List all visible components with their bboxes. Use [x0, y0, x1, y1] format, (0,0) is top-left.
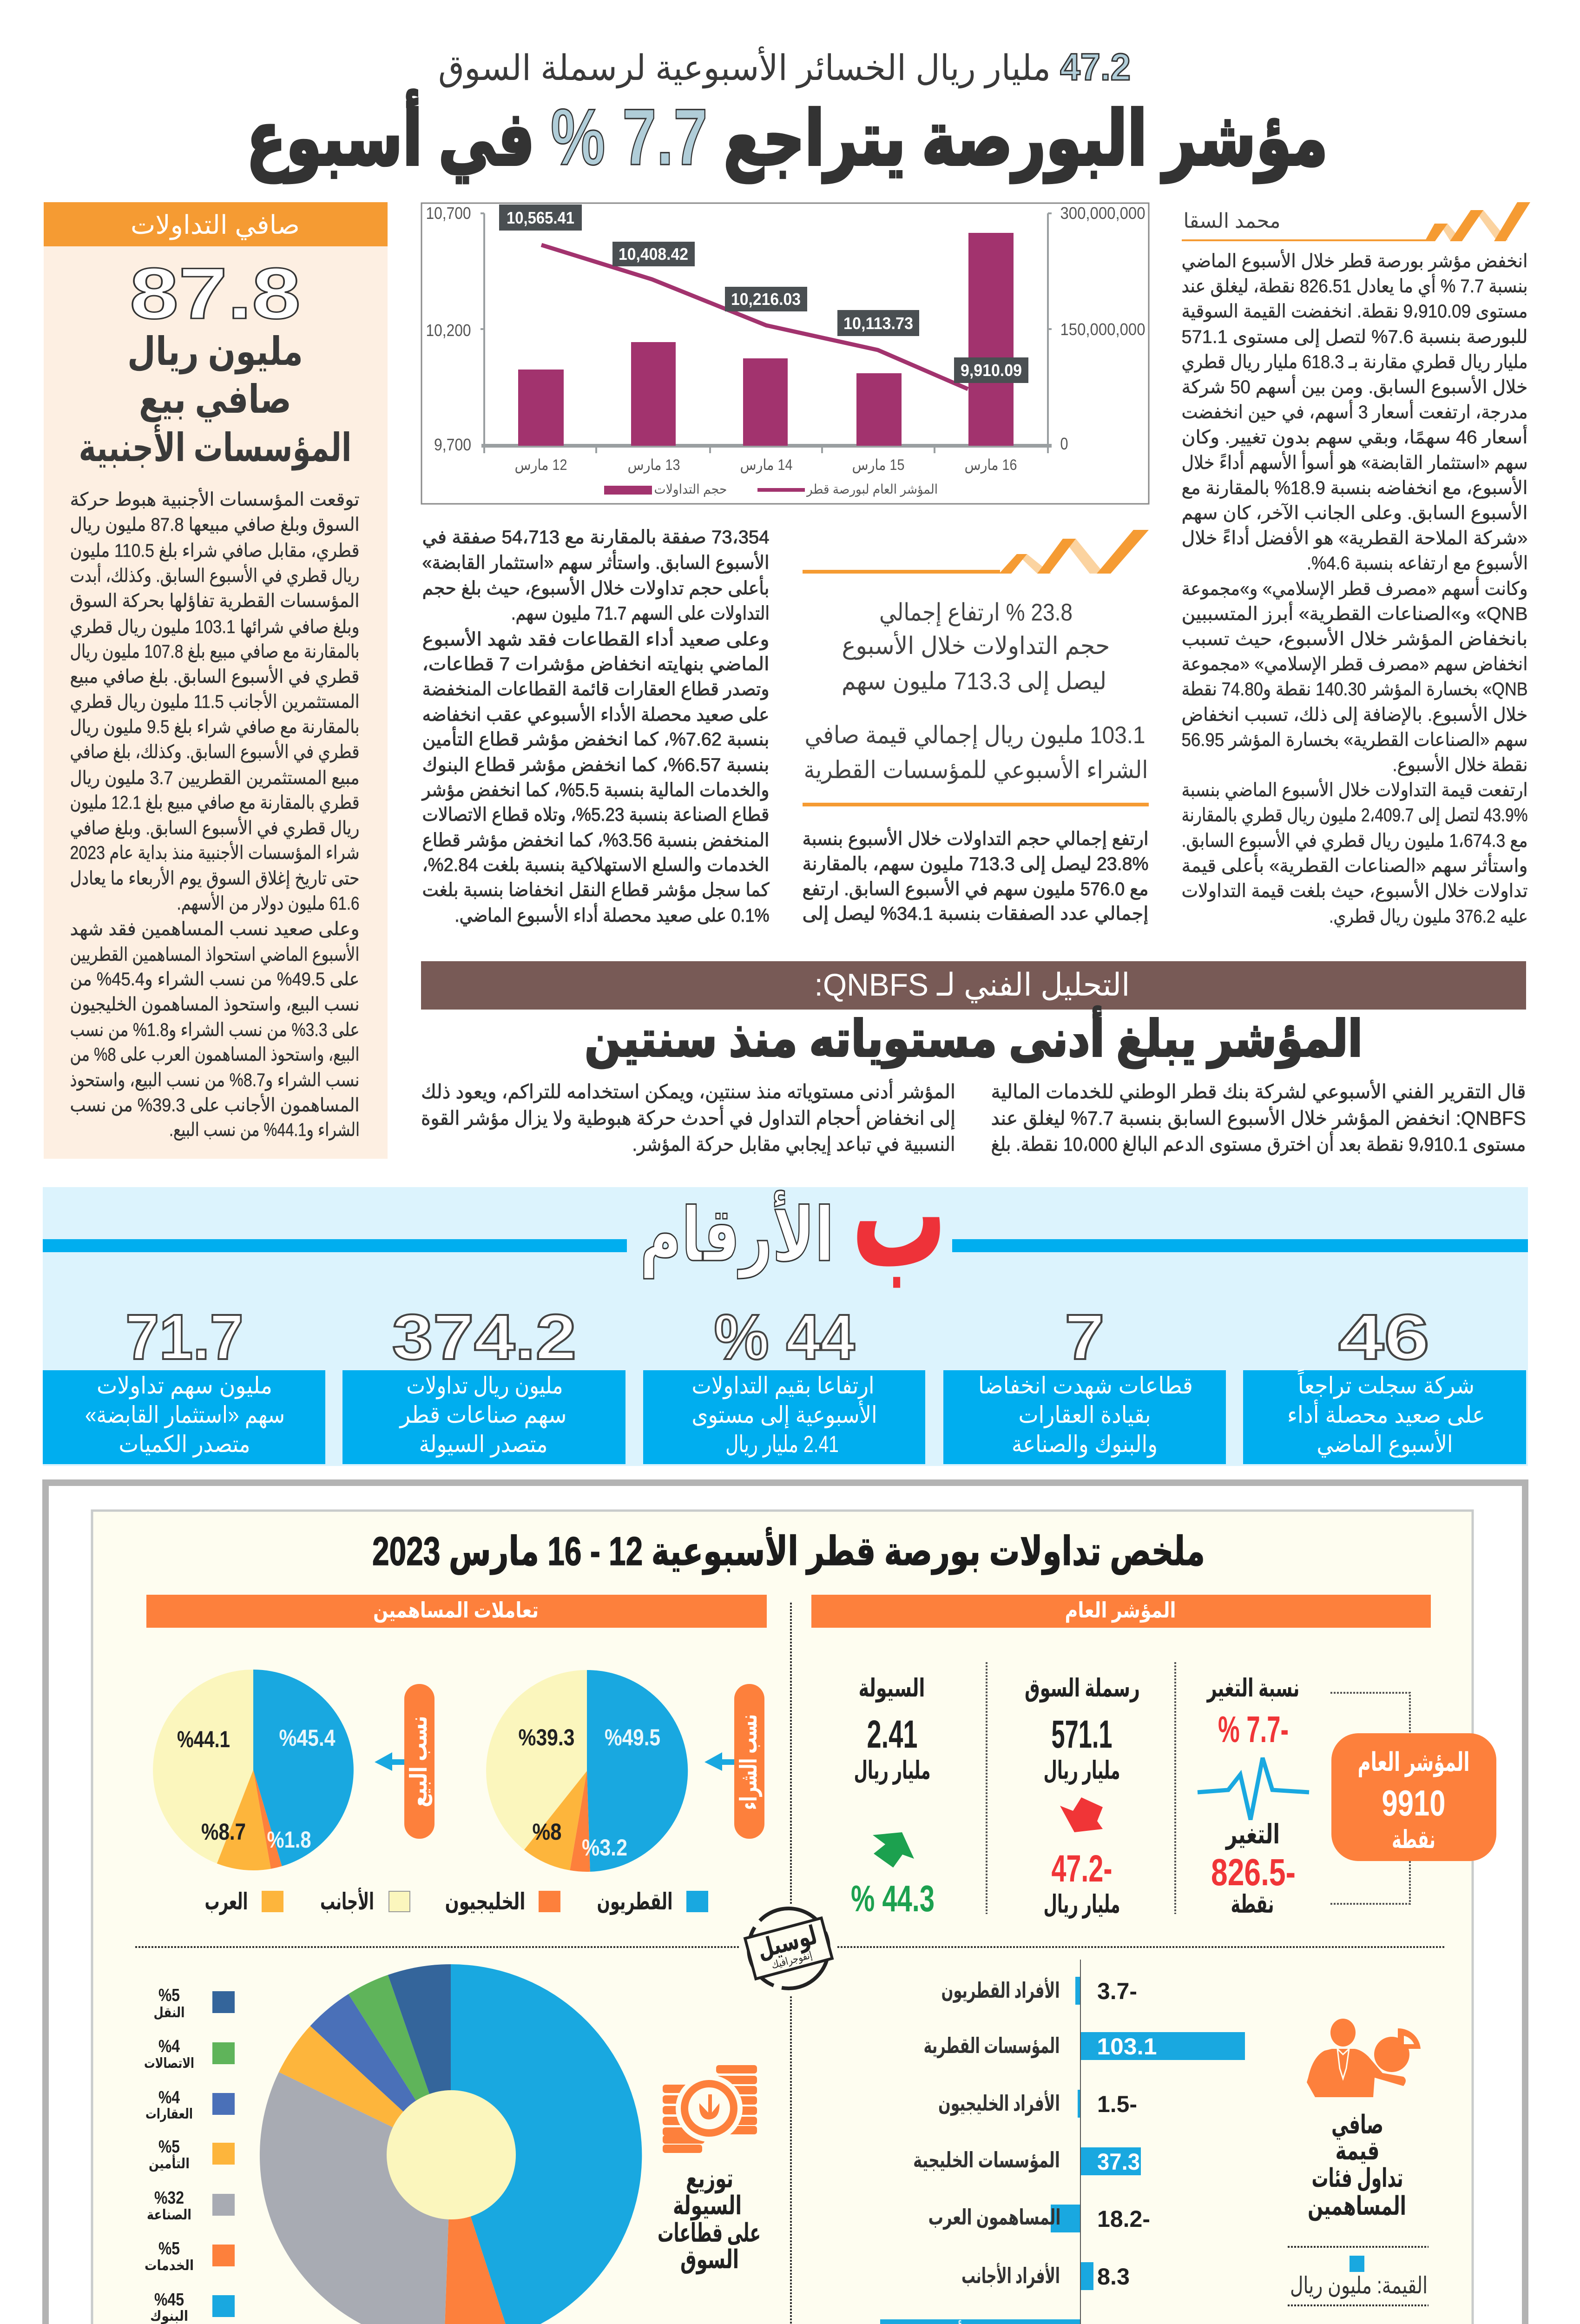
author byline with zigzag	[1182, 202, 1530, 241]
stat card: 71.7: مليون سهم تداولات	[97, 1373, 272, 1400]
date labels	[515, 456, 1017, 474]
article column middle	[421, 527, 770, 926]
stat numbers: 374.2	[392, 1301, 576, 1373]
donut title: على قطاعات	[658, 2218, 761, 2247]
value labels: 10,565.41	[507, 208, 574, 227]
value key	[1288, 2247, 1429, 2305]
donut legend: الخدمات	[145, 2258, 194, 2273]
axis labels: 10,200	[426, 321, 471, 340]
donut legend: %5	[158, 1986, 180, 2005]
panel background	[92, 1511, 1473, 2324]
panel headline	[79, 330, 351, 471]
technical analysis text right: QNBFS: انخفض المؤشر خلال الأسبوع السابق بنسبة 7.7% ليغلق عند	[991, 1106, 1526, 1129]
callout: highlights: 23.8 % ارتفاع إجمالي	[879, 599, 1073, 627]
article column middle: كما سجل مؤشر قطاع النقل انخفاضا بنسبة بلغت	[422, 880, 770, 901]
bars	[880, 1977, 1245, 2324]
big number: 87.8	[130, 253, 301, 334]
axis labels: 0	[1060, 434, 1068, 453]
pie legend: الأجانب	[320, 1887, 374, 1915]
donut legend: %4	[158, 2037, 180, 2056]
panel headline: مليون ريال	[127, 330, 303, 375]
article column middle: وعلى صعيد أداء القطاعات فقد شهد الأسبوع	[422, 627, 770, 650]
stamp	[745, 1908, 832, 1988]
panel body text	[70, 488, 360, 1141]
technical analysis text right: قال التقرير الفني الأسبوعي لشركة بنك قطر الوطني للخدمات المالية	[991, 1079, 1526, 1103]
value key: القيمة: مليون ريال	[1290, 2272, 1428, 2299]
stat: liquidity: % 44.3	[851, 1878, 935, 1919]
stat numbers: 46	[1338, 1301, 1429, 1373]
panel body text: على 3.3% من نسب الشراء و1.8% من نسب	[70, 1020, 360, 1041]
net value title: تداول فئات	[1311, 2163, 1403, 2193]
donut legend: الصناعة	[147, 2207, 191, 2223]
article column right: خلال الأسبوع السابق. ومن بين أسهم 50 شركة	[1181, 375, 1528, 398]
technical analysis text right	[991, 1079, 1526, 1156]
technical analysis text right: مستوى 9،910.1 نقطة بعد أن اخترق مستوى الدعم البالغ 10،000 نقطة. بلغ	[991, 1131, 1526, 1156]
sell pie chart: %8.7	[201, 1819, 246, 1845]
article column right: نقطة خلال الأسبوع.	[1392, 753, 1528, 776]
article column middle: التداولات على السهم 71.7 مليون سهم.	[511, 603, 770, 624]
stat: liquidity: 2.41	[867, 1712, 917, 1756]
arrow: sell pill to pie	[375, 1752, 404, 1771]
article column middle: قطاع الصناعة بنسبة 5.23%، وتلاه قطاع الاتصالات	[422, 805, 770, 825]
sell pie chart: %45.4	[279, 1725, 336, 1751]
article column right: بانخفاض المؤشر خلال الأسبوع، حيث تسبب	[1181, 627, 1528, 650]
chart: index and trading volume	[421, 203, 1149, 504]
article column right: أسعار 46 سهمًا، وبقي سهم بدون تغيير. وكان	[1181, 425, 1528, 448]
buy pie chart: %49.5	[605, 1724, 660, 1750]
axes	[481, 213, 1052, 453]
donut title	[658, 2164, 761, 2275]
pie legend: العرب	[204, 1888, 248, 1915]
header: shareholder transactions: تعاملات المساهمين	[373, 1598, 539, 1623]
panel background	[44, 202, 388, 1159]
sell pie chart: %44.1	[177, 1726, 230, 1752]
panel body text: وعلى صعيد نسب المساهمين فقد شهد	[70, 919, 360, 940]
stat: change: % 7.7-	[1218, 1709, 1289, 1750]
panel body text: قطري في الأسبوع السابق. بلغ صافي مبيع	[70, 665, 360, 687]
infographic title: ملخص تداولات بورصة قطر الأسبوعية 12 - 16 مارس 2023	[372, 1527, 1205, 1575]
date labels: 14 مارس	[740, 456, 793, 474]
stat: market cap: مليار ريال	[1044, 1890, 1120, 1919]
article column middle: الأسبوع السابق. واستأثر سهم «استثمار القابضة»	[422, 550, 770, 574]
stat card: 44 percent: الأسبوعية إلى مستوى	[691, 1400, 877, 1429]
sell pie chart: %1.8	[267, 1827, 311, 1853]
article column middle: الماضي بنهايته انخفاض مؤشرات 7 قطاعات،	[422, 654, 770, 675]
article column right: الأسبوع السابق. وعلى الجانب الآخر، كان سهم	[1181, 501, 1528, 524]
row labels: المؤسسات الخليجية	[913, 2148, 1060, 2172]
stat: market cap: 47.2-	[1051, 1848, 1113, 1890]
stat: liquidity: مليار ريال	[854, 1756, 930, 1785]
article column middle: بنسبة 6.57%، كما انخفض مؤشر قطاع البنوك	[422, 755, 770, 776]
panel body text: الأسبوع الماضي استحواذ المساهمين القطريين	[70, 943, 360, 965]
infographic outer frame	[46, 1483, 1525, 2324]
panel body text: السوق وبلغ صافي مبيعها 87.8 مليون ريال	[70, 515, 360, 535]
article column middle: المنخفض بنسبة 3.56%، كما انخفض مؤشر قطاع	[422, 830, 770, 851]
icon: coin stacks	[663, 2065, 757, 2153]
row labels	[913, 1977, 1060, 2324]
panel body text: بالمقارنة مع صافي شراء بلغ 9.5 مليون ريال	[70, 717, 360, 738]
row values: 103.1	[1097, 2034, 1157, 2060]
donut chart	[260, 1964, 642, 2324]
axis labels	[426, 204, 1145, 454]
net value bar chart	[880, 1960, 1245, 2324]
pill: buy ratios	[734, 1684, 764, 1839]
net value title: المساهمين	[1308, 2191, 1406, 2221]
article column middle: على صعيد محصلة الأداء الأسبوعي عقب انخفاضه	[422, 703, 770, 726]
author byline with zigzag: محمد السقا	[1183, 210, 1281, 232]
stat card: 46: شركة سجلت تراجعاً	[1298, 1369, 1475, 1399]
stat: market cap: رسملة السوق	[1025, 1674, 1140, 1703]
panel body text: ريال قطري في الأسبوع السابق. وكذلك، أبدت	[70, 563, 360, 587]
panel body text: قطري في الأسبوع السابق. وكذلك، بلغ صافي	[70, 740, 360, 763]
stat: change: التغير	[1225, 1819, 1280, 1850]
stat card: 374.2: سهم صناعات قطر	[399, 1402, 567, 1429]
article column right: واستأثر سهم «الصناعات القطرية» بأعلى قيمة	[1181, 853, 1528, 877]
stamp: لوسيل	[754, 1920, 820, 1965]
article column right: وكانت أسهم «مصرف قطر الإسلامي» و»مجموعة	[1181, 576, 1528, 600]
date labels: 13 مارس	[627, 456, 680, 474]
donut title: السوق	[680, 2245, 739, 2275]
icon: rising zigzag	[803, 530, 1149, 574]
pie legend: القطريون	[597, 1888, 673, 1915]
pie legend	[204, 1887, 708, 1915]
section heading: ب	[851, 1131, 947, 1297]
donut legend	[144, 1986, 235, 2324]
row values: 1.5-	[1097, 2091, 1137, 2117]
row labels: الأفراد القطريون	[941, 1977, 1060, 2003]
stat card: 374.2: متصدر السيولة	[419, 1431, 547, 1458]
net value title: قيمة	[1336, 2136, 1379, 2165]
article column right: مدرجة، ارتفعت أسعار 3 أسهم، في حين انخفضت	[1181, 400, 1528, 423]
article column middle continuation: 23.8% ليصل إلى 713.3 مليون سهم، بالمقارنة	[802, 854, 1149, 875]
panel: net trading	[44, 202, 388, 1159]
donut legend: %4	[158, 2088, 180, 2107]
stat card: 46: على صعيد محصلة أداء	[1287, 1400, 1485, 1428]
stat: change: 826.5-	[1211, 1851, 1296, 1894]
stat: change	[1198, 1674, 1309, 1918]
article column right: عليه 376.2 مليون ريال قطري.	[1329, 906, 1528, 927]
article column right: انخفاض سهم «مصرف قطر الإسلامي» «مجموعة	[1181, 654, 1528, 675]
article column middle: 0.1% على صعيد محصلة أداء الأسبوع الماضي.	[454, 903, 770, 926]
stat: liquidity	[851, 1674, 935, 1919]
row labels: المساهمون العرب	[928, 2205, 1060, 2230]
axis labels: 10,700	[426, 204, 471, 223]
stat: market cap: 571.1	[1051, 1712, 1113, 1756]
chart legend: المؤشر العام لبورصة قطر	[806, 482, 938, 497]
stat card: 7: والبنوك والصناعة	[1012, 1431, 1158, 1458]
arrow: buy pill to pie	[704, 1752, 734, 1771]
value labels	[499, 205, 1028, 383]
donut legend: النقل	[153, 2005, 185, 2020]
axis labels: 300,000,000	[1060, 204, 1145, 223]
section heading: الأرقام	[640, 1190, 834, 1279]
donut legend: %32	[154, 2188, 184, 2208]
technical analysis banner: التحليل الفني لـ QNBFS:	[814, 967, 1130, 1004]
article column right: تداولات خلال الأسبوع، حيث بلغت قيمة التداولات	[1181, 879, 1528, 902]
stat card: 7: قطاعات شهدت انخفاضا	[978, 1373, 1193, 1400]
stamp: إنفوجرافيك	[770, 1949, 814, 1971]
donut title: توزيع	[686, 2164, 733, 2194]
row values: 3.7-	[1097, 1978, 1137, 2004]
stat card: 44 percent: ارتفاعا بقيم التداولات	[691, 1373, 875, 1400]
axis labels: 9,700	[434, 435, 471, 454]
article column right: للبورصة بنسبة 7.6% لتصل إلى مستوى 571.1	[1181, 327, 1528, 348]
bars	[518, 233, 1014, 446]
article column right: 43.9% لتصل إلى 2،409.7 مليون ريال قطري بالمقارنة	[1181, 805, 1528, 826]
article column middle: وتصدر قطاع العقارات قائمة القطاعات المنخفضة	[422, 679, 770, 700]
orange rule	[803, 803, 1149, 806]
header: shareholder transactions	[146, 1595, 767, 1628]
donut legend: الاتصالات	[144, 2056, 194, 2071]
article column middle continuation: ارتفع إجمالي حجم التداولات خلال الأسبوع بنسبة	[802, 827, 1149, 850]
panel headline: صافي بيع	[139, 377, 291, 423]
buy pie chart	[486, 1670, 688, 1872]
chart legend: حجم التداولات	[654, 482, 727, 497]
callout: highlights: ليصل إلى 713.3 مليون سهم	[842, 668, 1106, 695]
subtitle: 47.2 مليار ريال الخسائر الأسبوعية لرسملة السوق	[438, 46, 1131, 89]
article column right: «شركة الملاحة القطرية» هو الأفضل أداءً خلال	[1181, 526, 1528, 549]
stat card: 374.2	[342, 1370, 625, 1464]
axis	[1080, 1960, 1081, 2324]
article column right: سهم «الصناعات القطرية» بخسارة المؤشر 56.95	[1181, 730, 1528, 751]
article column right: انخفض مؤشر بورصة قطر خلال الأسبوع الماضي	[1181, 249, 1528, 272]
section background	[43, 1187, 1528, 1466]
stat numbers	[125, 1301, 1429, 1373]
net value title: صافي	[1331, 2110, 1383, 2140]
donut legend: العقارات	[145, 2106, 193, 2122]
pie legend: الخليجيون	[445, 1888, 525, 1915]
stat card: 71.7	[43, 1370, 325, 1464]
general index badge	[1331, 1733, 1496, 1861]
row labels: الأفراد الخليجيون	[938, 2090, 1060, 2116]
stat card: 71.7: سهم «استثمار القابضة»	[85, 1402, 285, 1429]
technical analysis text left: النسبية في تباعد إيجابي مقابل حركة المؤشر.	[632, 1133, 955, 1156]
donut legend: البنوك	[150, 2309, 188, 2324]
panel body text: شراء المؤسسات الأجنبية منذ بداية عام 2023	[70, 841, 360, 864]
article column middle continuation	[802, 827, 1149, 924]
stat: change: نسبة التغير	[1206, 1674, 1299, 1703]
stat: change: نقطة	[1231, 1890, 1274, 1918]
general index badge: نقطة	[1392, 1826, 1435, 1854]
stat card: 374.2: مليون ريال تداولات	[406, 1373, 563, 1400]
panel: by the numbers	[43, 1131, 1528, 1466]
panel body text: نسب الشراء و8.7% من نسب البيع، واستحوذ	[70, 1070, 360, 1091]
buy pie chart: %3.2	[582, 1835, 627, 1861]
header: general index: المؤشر العام	[1065, 1598, 1176, 1623]
general index badge: 9910	[1382, 1783, 1445, 1823]
icon: presenter with pie chart	[1307, 2019, 1421, 2097]
technical analysis text left: إلى انخفاض أحجام التداول في أحدث حركة هبوطية ولا يزال مؤشر القوة	[421, 1105, 955, 1130]
header: general index	[811, 1595, 1431, 1628]
article column middle: بأعلى حجم تداولات خلال الأسبوع، حيث بلغ حجم	[422, 575, 770, 599]
panel body text: قطري، مقابل صافي شراء بلغ 110.5 مليون	[70, 541, 360, 561]
panel body text: حتى تاريخ إغلاق السوق يوم الأربعاء ما يعادل	[70, 866, 360, 889]
icon: red down arrow	[1060, 1797, 1103, 1832]
article column right: مليار ريال قطري مقارنة بـ 618.3 مليار ريال قطري	[1181, 352, 1528, 373]
panel body text: المساهمون الأجانب على 39.3% من نسب	[70, 1093, 360, 1116]
callout: highlights: حجم التداولات خلال الأسبوع	[842, 631, 1110, 660]
main title: مؤشر البورصة يتراجع 7.7 % في أسبوع	[246, 90, 1328, 183]
stat: market cap: مليار ريال	[1044, 1756, 1120, 1785]
article column middle: 73،354 صفقة بالمقارنة مع 54،713 صفقة في	[422, 527, 770, 548]
buy pie chart: %8	[533, 1819, 561, 1845]
stat card: 44 percent	[643, 1370, 925, 1464]
article column right: سهم «استثمار القابضة» هو أسوأ الأسهم أداءً خلال	[1181, 450, 1528, 474]
panel body text: المؤسسات القطرية تفاؤلها بحركة السوق	[70, 591, 360, 612]
technical analysis heading: المؤشر يبلغ أدنى مستوياته منذ سنتين	[585, 1006, 1363, 1069]
panel body text: بالمقارنة مع صافي مبيع بلغ 107.8 مليون ريال	[70, 641, 359, 662]
article column right	[1181, 249, 1528, 927]
chart frame	[421, 203, 1149, 504]
panel body text: مبيع المستثمرين القطريين 3.7 مليون ريال	[70, 768, 360, 789]
donut legend: %5	[158, 2137, 180, 2157]
panel headline: المؤسسات الأجنبية	[79, 424, 351, 471]
stat card: 44 percent: 2.41 مليار ريال	[725, 1431, 839, 1458]
section heading	[640, 1131, 947, 1297]
axis labels: 150,000,000	[1060, 320, 1145, 339]
panel header: صافي التداولات	[131, 210, 300, 240]
panel body text: توقعت المؤسسات الأجنبية هبوط حركة	[70, 488, 360, 510]
icon: green up arrow	[873, 1832, 914, 1868]
index line	[541, 245, 968, 389]
callout: highlights: 103.1 مليون ريال إجمالي قيمة صافي	[805, 722, 1145, 749]
donut legend: %5	[158, 2239, 180, 2258]
article column middle continuation: إجمالي عدد الصفقات بنسبة 34.1% ليصل إلى	[802, 904, 1149, 924]
stat: liquidity: السيولة	[859, 1674, 925, 1703]
article column right: مستوى 9،910.09 نقطة. انخفضت القيمة السوقية	[1181, 301, 1528, 322]
panel body text: نسب البيع، واستحوذ المساهمون الخليجيون	[70, 994, 360, 1015]
panel body text: قطري بالمقارنة مع صافي مبيع بلغ 12.1 مليون	[70, 792, 360, 813]
pill: buy ratios: نسب الشراء	[736, 1714, 763, 1810]
donut legend: التأمين	[149, 2154, 190, 2172]
row labels: المؤسسات القطرية	[924, 2034, 1060, 2058]
dotted dividers	[135, 1603, 1444, 2324]
stat card: 46: الأسبوع الماضي	[1317, 1430, 1453, 1458]
stat card: 7: بقيادة العقارات	[1019, 1402, 1151, 1428]
pill: sell ratios	[404, 1684, 434, 1839]
value labels: 9,910.09	[961, 361, 1022, 380]
technical analysis text left	[421, 1079, 955, 1156]
net value title	[1308, 2110, 1406, 2221]
callout: highlights: الشراء الأسبوعي للمؤسسات القطرية	[804, 755, 1148, 784]
pill: sell ratios: نسب البيع	[406, 1716, 433, 1807]
article column middle: الخدمات والسلع الاستهلاكية بنسبة بلغت 2.84%،	[422, 855, 770, 876]
technical analysis banner	[421, 961, 1526, 1010]
sell pie chart	[153, 1670, 354, 1870]
article column middle continuation: مع 576.0 مليون سهم في الأسبوع السابق. ارتفع	[802, 877, 1149, 900]
article column right: خلال الأسبوع. بالإضافة إلى ذلك، تسبب انخفاض	[1181, 703, 1528, 726]
value labels: 10,113.73	[843, 314, 913, 333]
row values: 8.3	[1097, 2264, 1130, 2290]
chart legend	[604, 482, 938, 497]
date labels: 12 مارس	[515, 456, 567, 474]
panel body text: على 49.5% من نسب الشراء و45.4% من	[70, 969, 360, 990]
section rails	[43, 1239, 1528, 1252]
stat numbers: 71.7	[125, 1301, 244, 1373]
article column middle: والخدمات المالية بنسبة 5.5%، كما انخفض مؤشر	[421, 780, 770, 801]
panel header	[44, 202, 388, 246]
panel body text: المستثمرين الأجانب 11.5 مليون ريال قطري	[70, 690, 360, 713]
article column right: QNB» بخسارة المؤشر 140.30 نقطة و74.80 نقطة	[1181, 679, 1528, 700]
row labels: الأفراد الأجانب	[961, 2263, 1060, 2288]
article column right: بنسبة 7.7 % أي ما يعادل 826.51 نقطة، ليغلق عند	[1181, 274, 1528, 297]
article column right: الأسبوع مع ارتفاعه بنسبة 4.6%.	[1307, 551, 1528, 574]
article column right: ارتفعت قيمة التداولات خلال الأسبوع الماضي بنسبة	[1181, 778, 1528, 801]
date labels: 15 مارس	[852, 456, 904, 474]
donut legend: %45	[154, 2290, 184, 2310]
value labels: 10,408.42	[619, 244, 688, 264]
date labels: 16 مارس	[965, 456, 1017, 474]
stat card: 71.7: متصدر الكميات	[119, 1431, 250, 1458]
article column middle: بنسبة 7.62%، كما انخفض مؤشر قطاع التأمين	[422, 726, 770, 750]
stat numbers: 7	[1065, 1301, 1105, 1373]
panel body text: الشراء و44.1% من نسب البيع.	[169, 1120, 360, 1141]
article column right: QNB» و»الصناعات القطرية» أبرز المتسببين	[1181, 601, 1528, 625]
stat numbers: % 44	[714, 1301, 855, 1373]
general index badge: المؤشر العام	[1358, 1747, 1469, 1777]
buy pie chart: %39.3	[519, 1724, 574, 1750]
infographic panel	[92, 1511, 1496, 2324]
stat card: 46	[1243, 1369, 1526, 1464]
row values: 18.2-	[1097, 2206, 1150, 2232]
article column right: مع 1،674.3 مليون ريال قطري في الأسبوع السابق.	[1181, 829, 1528, 852]
panel body text: ريال قطري في الأسبوع السابق. وبلغ صافي	[70, 816, 360, 839]
stat: market cap	[1025, 1674, 1140, 1919]
panel body text: البيع، واستحوذ المساهمون العرب على 8% من	[70, 1044, 360, 1065]
row values: 37.3	[1097, 2149, 1140, 2175]
value labels: 10,216.03	[731, 290, 801, 309]
panel body text: 61.6 مليون دولار من الأسهم.	[177, 891, 360, 914]
row values	[1097, 1978, 1165, 2324]
article column right: الأسبوع، مع انخفاضه بنسبة 18.9% بالمقارنة مع	[1181, 476, 1528, 499]
panel body text: وبلغ صافي شرائها 103.1 مليون ريال قطري	[70, 617, 360, 638]
icon: pulse	[1198, 1758, 1309, 1820]
donut title: السيولة	[673, 2191, 742, 2221]
technical analysis text left: المؤشر أدنى مستوياته منذ سنتين، ويمكن استخدامه للتراكم، ويعود ذلك	[421, 1079, 955, 1103]
callout: highlights	[804, 599, 1148, 784]
stat card: 7	[943, 1370, 1226, 1464]
